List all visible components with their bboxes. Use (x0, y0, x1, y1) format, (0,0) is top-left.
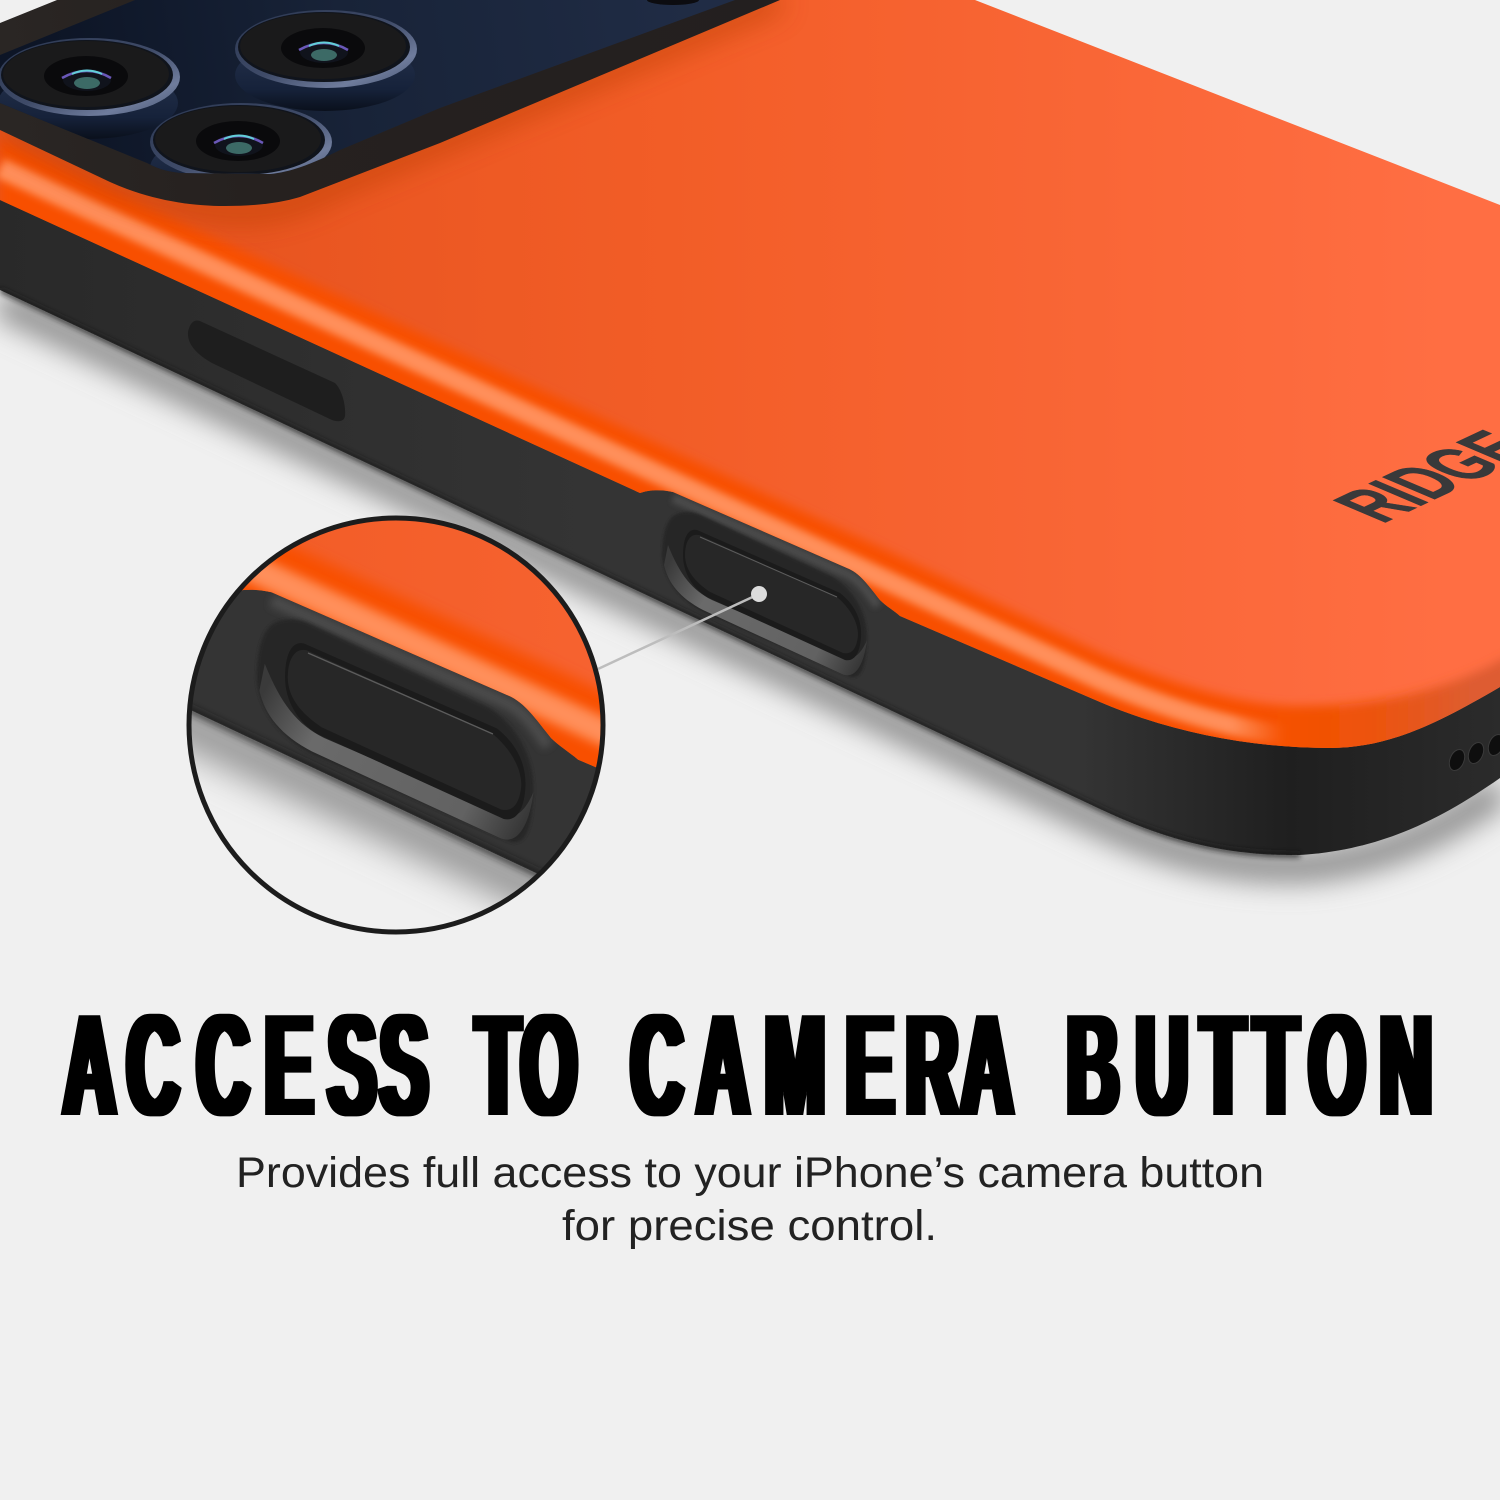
title (63, 985, 1432, 1147)
phone case with orange back and dark side (0, 0, 1500, 867)
lens upper (235, 10, 417, 111)
description text (236, 1149, 1264, 1250)
title: BUTTON (1067, 985, 1432, 1147)
title: ACCESS (63, 985, 428, 1147)
small dark sensor (647, 0, 699, 5)
camera plate and lenses (0, 0, 734, 174)
callout leader line (598, 586, 767, 669)
magnified inset of camera button (186, 516, 606, 934)
lens lower (150, 103, 332, 174)
title: TO (476, 985, 577, 1147)
description text: Provides full access to your iPhone’s camera button (236, 1149, 1264, 1197)
lens left (0, 38, 180, 139)
speaker holes (1446, 732, 1500, 773)
description text: for precise control. (562, 1202, 937, 1250)
title: CAMERA (631, 985, 1013, 1147)
camera island (0, 0, 780, 206)
island frame (0, 0, 780, 206)
